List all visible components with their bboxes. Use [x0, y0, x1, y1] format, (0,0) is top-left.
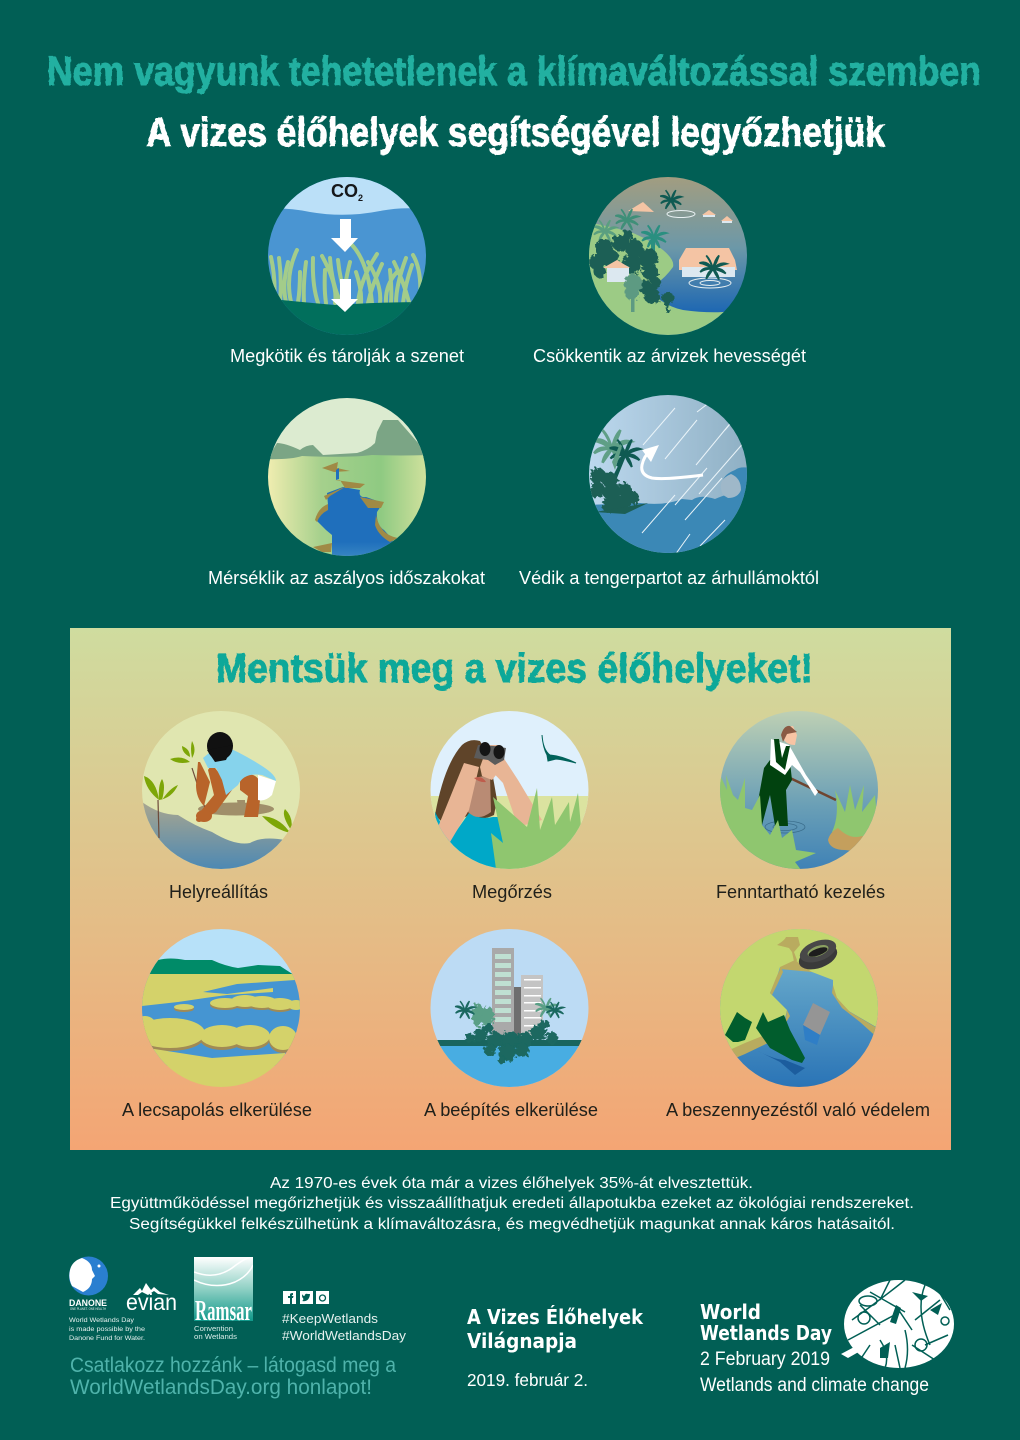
text: sponsor note: World Wetlands Day — [69, 1317, 135, 1324]
caption: Védik a tengerpartot az árhullámoktól — [519, 568, 819, 588]
caption: Mérséklik az aszályos időszakokat — [208, 568, 485, 588]
text: Hungarian event name and date: A Vizes Élőhelyek — [467, 1305, 644, 1329]
caption: Megkötik és tárolják a szenet — [230, 346, 464, 366]
text: World Wetlands Day lockup: World — [700, 1300, 761, 1324]
caption: Helyreállítás — [169, 882, 268, 902]
logo: Ramsar — [194, 1257, 253, 1341]
benefit: carbon storage — [230, 177, 464, 366]
text: World Wetlands Day lockup — [700, 1300, 929, 1396]
title: subheading: A vizes élőhelyek segítségével legyőzhetjük — [146, 109, 885, 155]
logo: Danone: ONE PLANET. ONE HEALTH — [70, 1307, 106, 1311]
label: CO2 formula: CO — [331, 181, 358, 201]
label: CO2 formula: 2 — [358, 193, 363, 203]
benefit: coastal protection — [519, 395, 819, 588]
logo: Danone: DANONE — [69, 1298, 107, 1309]
panel: save the wetlands — [70, 628, 951, 1150]
logo: Ramsar: Convention — [194, 1324, 233, 1333]
text: sponsor note: Danone Fund for Water. — [69, 1335, 145, 1342]
icon: marshland — [133, 929, 304, 1090]
icons: social media — [283, 1291, 329, 1304]
icon: litter in water — [718, 929, 880, 1087]
caption: Megőrzés — [472, 882, 552, 902]
icon: storm surge circle — [585, 395, 750, 555]
text: call to action — [70, 1353, 396, 1399]
text: Hungarian event name and date: 2019. február 2. — [467, 1370, 588, 1390]
logo: Ramsar: on Wetlands — [194, 1332, 237, 1341]
text: World Wetlands Day lockup: 2 February 2019 — [700, 1349, 830, 1370]
text block: closing statement — [110, 1175, 914, 1233]
item: sustainable management — [716, 711, 885, 902]
caption: A beépítés elkerülése — [424, 1100, 598, 1120]
icon: buildings on island — [430, 929, 590, 1091]
caption: A beszennyezéstől való védelem — [666, 1100, 930, 1120]
item: restoration — [142, 711, 303, 902]
icon: flooded landscape circle — [585, 177, 747, 340]
logo: evian: evian — [126, 1289, 177, 1315]
text: hashtags: #WorldWetlandsDay — [282, 1329, 407, 1343]
text: sponsor note — [69, 1317, 145, 1342]
benefit: flood reduction — [533, 177, 806, 366]
item: avoid development — [424, 929, 598, 1120]
text block: closing statement: Együttműködéssel megőrizhetjük és visszaállíthatjuk eredeti állapotukba ezeket az ökológiai rendszereket. — [110, 1195, 914, 1212]
caption: Csökkentik az árvizek hevességét — [533, 346, 806, 366]
icon: river landscape circle — [262, 398, 432, 560]
text: Hungarian event name and date: Világnapja — [467, 1329, 577, 1353]
icon: woman with binoculars — [430, 711, 590, 874]
logo: Ramsar: Ramsar — [195, 1295, 252, 1327]
text: hashtags: #KeepWetlands — [282, 1312, 378, 1326]
icon: planting person — [142, 711, 303, 875]
text block: closing statement: Az 1970-es évek óta már a vizes élőhelyek 35%-át elvesztettük. — [270, 1175, 753, 1192]
caption: Fenntartható kezelés — [716, 882, 885, 902]
icon: carbon storage circle — [262, 177, 432, 340]
text: hashtags — [282, 1312, 407, 1343]
panel heading: Mentsük meg a vizes élőhelyeket! — [216, 645, 813, 691]
text: sponsor note: is made possible by the — [69, 1326, 145, 1333]
item: pollution protection — [666, 929, 930, 1120]
icon: man with rake — [720, 711, 878, 875]
benefit: drought mitigation — [208, 398, 485, 588]
logo: Danone — [69, 1256, 108, 1311]
logo: World Wetlands Day emblem — [841, 1280, 954, 1368]
text: World Wetlands Day lockup: Wetlands and climate change — [700, 1375, 929, 1396]
text: call to action: Csatlakozz hozzánk – látogasd meg a — [70, 1353, 396, 1377]
caption: A lecsapolás elkerülése — [122, 1100, 312, 1120]
text: call to action: WorldWetlandsDay.org honlapot! — [70, 1375, 372, 1399]
text block: closing statement: Segítségükkel felkészülhetünk a klímaváltozásra, és megvédhetjük magunkat annak káros hatásaitól. — [129, 1216, 895, 1233]
item: avoid drainage — [122, 929, 312, 1120]
item: conservation — [430, 711, 590, 902]
text: World Wetlands Day lockup: Wetlands Day — [700, 1321, 832, 1345]
text: Hungarian event name and date — [467, 1305, 644, 1390]
